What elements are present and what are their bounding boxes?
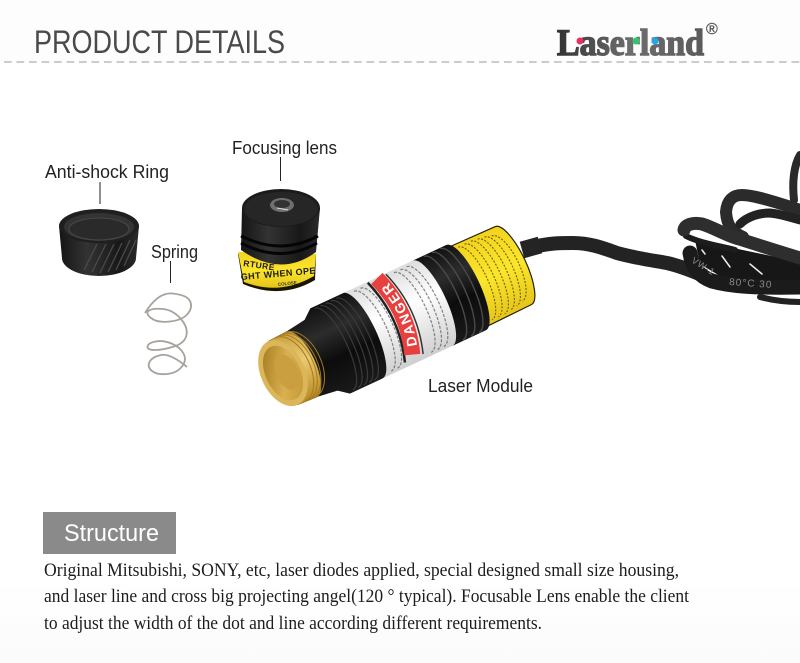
laser module [258,226,536,406]
yellow section [447,220,544,328]
label: spring [151,242,198,283]
spring [145,293,191,374]
logo: Laserland: Laserland [557,23,704,64]
cable and coil [522,155,800,302]
description text: Original Mitsubishi, SONY, etc, laser diodes applied, special designed small size housing, [44,561,679,581]
focusing lens: RTURE [243,258,276,272]
structure heading: Structure [64,520,159,547]
label: focusing lens [232,138,337,181]
label: anti-shock ring [45,162,169,204]
ribbed black section [413,239,499,346]
danger band [366,272,424,363]
description text: and laser line and cross big projecting angel(120 ° typical). Focusable Lens enable the client [44,587,690,607]
page canvas: 80°C 30 [729,277,773,291]
cable print: VW-1 [690,255,717,277]
logo: Laserland: ® [706,21,718,38]
focusing lens [238,189,320,291]
focusing lens: COLOSE [278,280,297,287]
page title: PRODUCT DETAILS [34,24,285,60]
label: anti-shock ring: Anti-shock Ring [45,162,169,182]
anti-shock ring [59,209,139,276]
danger band: DANGER [382,282,417,346]
black grip [281,287,395,407]
brass nozzle [268,326,329,406]
description text [44,561,690,634]
focusing lens: GHT WHEN OPE [240,265,316,282]
description text: to adjust the width of the dot and line according different requirements. [44,614,542,634]
structure heading [43,512,176,554]
label: focusing lens: Focusing lens [232,138,337,158]
label: laser module: Laser Module [428,376,533,396]
white label [343,255,465,378]
label: spring: Spring [151,242,198,262]
